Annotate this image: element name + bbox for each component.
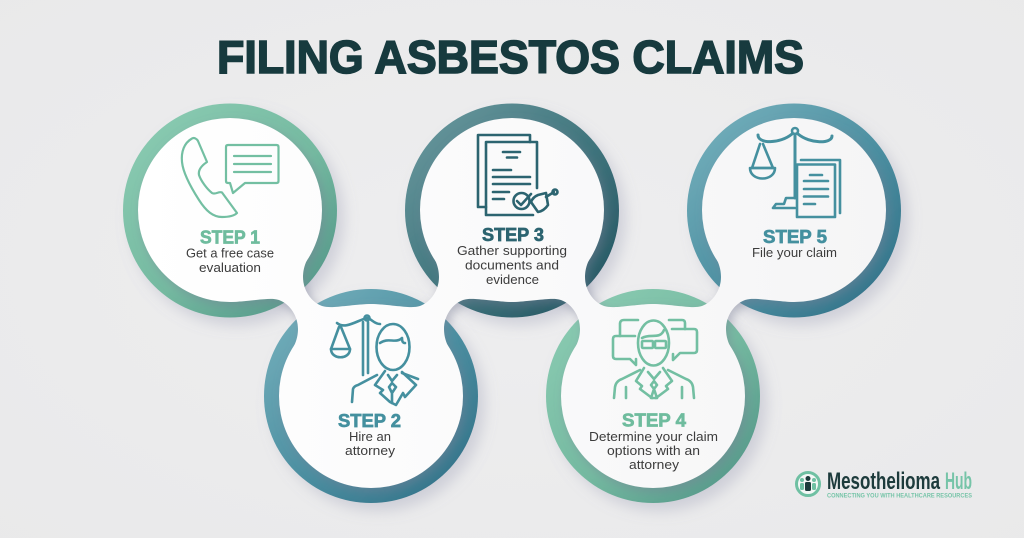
panel: step 5 bbox=[750, 128, 840, 260]
text: step 3 description: documents and bbox=[465, 258, 559, 272]
icon: scales and documents bbox=[750, 128, 840, 217]
text: step 2 description bbox=[345, 429, 396, 458]
text: step 2 description: Hire an bbox=[349, 429, 391, 444]
heading: step 4: STEP 4 bbox=[622, 410, 686, 430]
text: step 4 description: Determine your claim bbox=[589, 429, 718, 444]
text: step 5 description: File your claim bbox=[752, 245, 837, 260]
connected white panel shape bbox=[138, 118, 886, 488]
text: step 4 description: options with an bbox=[607, 443, 700, 458]
heading: step 1: STEP 1 bbox=[200, 228, 260, 248]
panel: step 3 bbox=[457, 135, 567, 287]
panel: step 4 bbox=[589, 320, 718, 472]
icon: documents and stamp bbox=[478, 135, 558, 215]
text: step 3 description bbox=[457, 243, 567, 287]
gradient rings of the five steps bbox=[123, 104, 901, 503]
icon: scales and attorney bbox=[331, 316, 418, 405]
icon: telephone and speech bubble bbox=[182, 138, 278, 217]
panel: step 2 bbox=[331, 316, 418, 458]
text: step 4 description: attorney bbox=[629, 457, 680, 472]
heading: step 5: STEP 5 bbox=[763, 227, 827, 247]
text: step 3 description: Gather supporting bbox=[457, 243, 567, 258]
text: step 1 description: evaluation bbox=[199, 260, 261, 275]
text: step 1 description bbox=[186, 246, 274, 275]
logo wordmark: Mesothelioma bbox=[827, 468, 940, 495]
logo wordmark accent: Hub bbox=[945, 468, 972, 495]
text: step 4 description bbox=[589, 429, 718, 472]
heading: step 3: STEP 3 bbox=[482, 225, 544, 245]
panel: step 1 bbox=[182, 138, 278, 275]
icon: attorney with speech bubbles bbox=[613, 320, 697, 398]
logo tagline: CONNECTING YOU WITH HEALTHCARE RESOURCES bbox=[827, 492, 973, 500]
text: step 1 description: Get a free case bbox=[186, 246, 274, 260]
heading: step 2: STEP 2 bbox=[338, 411, 401, 431]
icon: logo people badge bbox=[796, 472, 820, 496]
text: step 3 description: evidence bbox=[486, 272, 539, 287]
text: step 2 description: attorney bbox=[345, 443, 396, 458]
logo: Mesothelioma Hub bbox=[796, 468, 973, 500]
title: FILING ASBESTOS CLAIMS bbox=[217, 31, 804, 83]
